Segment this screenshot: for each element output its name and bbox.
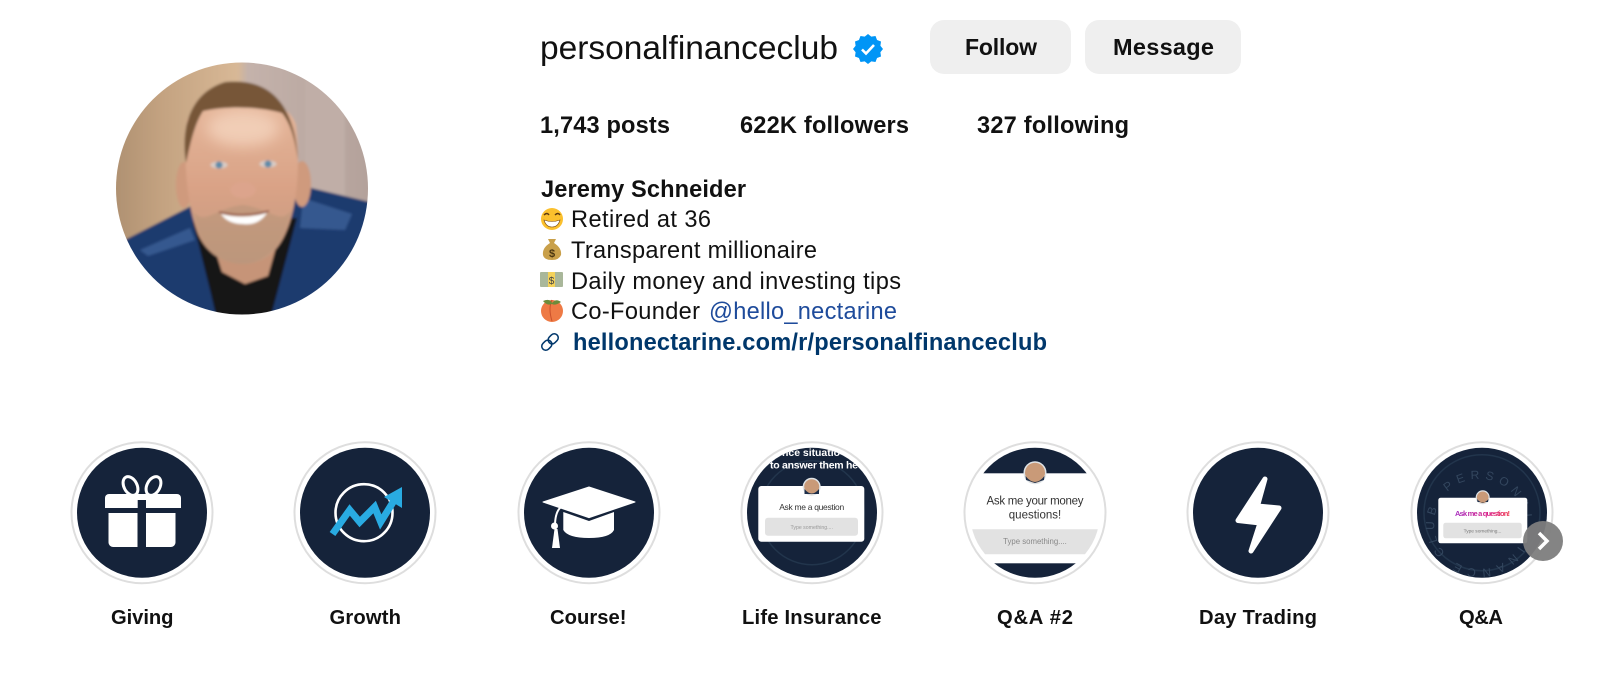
bio line: millionaire: $ [549,248,555,260]
highlight: q&a [1410,441,1554,629]
highlight: giving [72,442,212,629]
highlight: q&a 2: Ask me your money [986,496,1084,508]
bio name: Jeremy Schneider [541,177,746,203]
highlight: life insurance: to answer them he [770,460,858,472]
highlight: day trading [1188,442,1328,629]
highlight: giving: Giving [111,607,174,629]
highlight: growth: Growth [330,607,401,629]
highlight: life insurance: Life Insurance [742,607,882,629]
stat: posts: 1,743 posts [540,113,670,139]
profile photo [116,62,368,314]
highlight: course [518,442,660,629]
bio link: hellonectarine.com/r/personalfinanceclub [573,330,1047,356]
bio line: millionaire: Transparent millionaire [571,238,817,264]
username: personalfinanceclub [540,30,838,67]
icon: verified badge [853,34,883,64]
icon: next arrow [1523,521,1563,561]
bio line: tips: $ [549,276,555,287]
highlight: life insurance: nce situatio [782,447,840,459]
highlight: q&a: Q&A [1459,607,1503,629]
stat: followers: 622K followers [740,113,909,139]
highlight: life insurance: Type something.... [791,525,833,531]
highlight: q&a: Type something... [1464,528,1501,534]
highlight: growth [294,442,436,629]
highlight: q&a 2 [964,442,1106,629]
highlight: q&a 2: questions! [1009,510,1061,522]
bio line: co-founder [541,299,897,325]
icon: graduation cap [543,487,635,548]
highlight: life insurance [742,442,882,629]
icon: gift [105,474,181,547]
highlight: life insurance: Ask me a question [779,502,844,512]
bio line: retired: Retired at 36 [571,207,711,233]
highlight: q&a: Ask me a question! [1455,509,1510,518]
button: message: Message [1113,34,1214,60]
highlight: q&a: PERSONAL FINANCE CLUB [1426,470,1532,577]
highlight: course: Course! [550,607,626,629]
bio line: co-founder: Co-Founder [571,299,700,325]
stat: following: 327 following [977,113,1129,139]
highlight: day trading: Day Trading [1199,607,1317,629]
button: follow: Follow [965,34,1037,60]
highlight: q&a 2: Type something.... [1003,537,1067,546]
icon: growth chart [332,484,402,541]
button: follow [930,20,1071,74]
icon: lightning bolt [1238,479,1279,551]
button: message [1085,20,1241,74]
bio line: co-founder: @hello_nectarine [709,299,897,325]
highlight: q&a 2: Q&A #2 [997,607,1073,629]
bio line: tips: Daily money and investing tips [571,269,901,295]
